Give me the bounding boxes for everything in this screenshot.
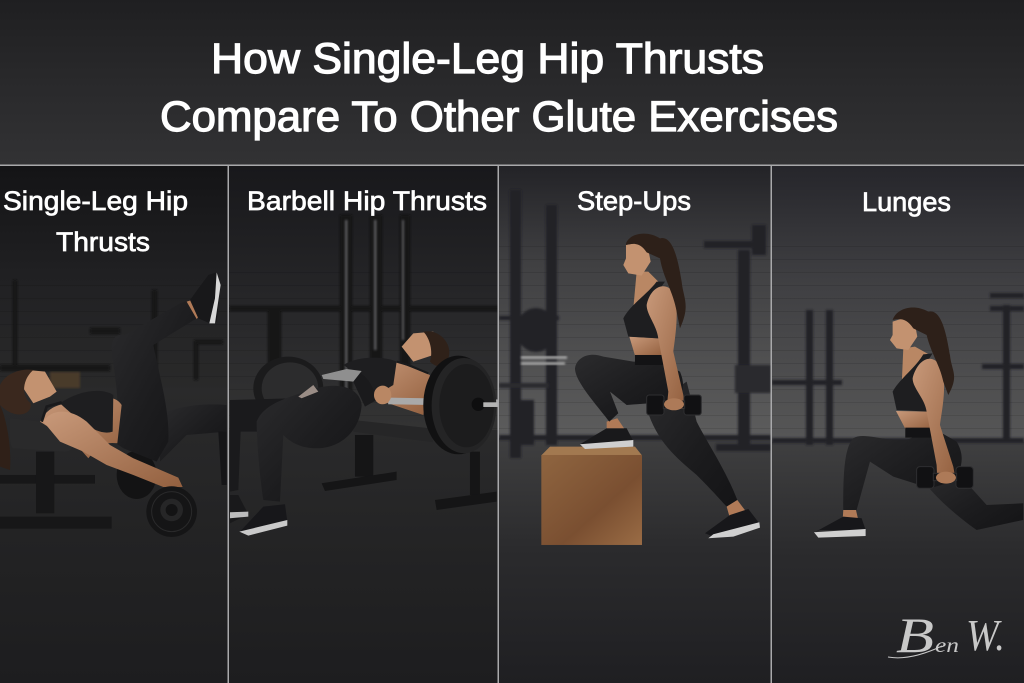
panel: lunges bbox=[772, 166, 1024, 683]
dumbbell bbox=[647, 395, 701, 415]
head bbox=[890, 315, 917, 350]
dumbbell bbox=[146, 486, 197, 537]
arm bbox=[913, 359, 956, 481]
upper body bbox=[40, 397, 122, 458]
panel dividers bbox=[0, 164, 1024, 683]
hip pad bbox=[345, 369, 376, 406]
title bbox=[160, 35, 838, 141]
heading: barbell hip thrusts: Barbell Hip Thrusts bbox=[247, 186, 487, 216]
signature: W. bbox=[966, 611, 1005, 660]
signature bbox=[888, 607, 1005, 663]
panel: step-ups bbox=[499, 177, 770, 584]
barbell bbox=[388, 398, 498, 405]
panel: barbell hip thrusts bbox=[229, 166, 498, 536]
figure: woman doing single-leg hip thrust on bench bbox=[0, 272, 227, 537]
panel: single-leg hip thrusts bbox=[0, 166, 228, 537]
signature: B bbox=[896, 607, 934, 663]
chest and head bbox=[374, 362, 430, 415]
heading: single-leg hip thrusts: Single-Leg Hip bbox=[3, 186, 188, 216]
heading: step-ups: Step-Ups bbox=[577, 186, 691, 216]
hanging hair bbox=[0, 405, 10, 470]
rear plate bbox=[253, 356, 323, 400]
torso bbox=[896, 411, 933, 430]
title: Compare To Other Glute Exercises bbox=[160, 93, 838, 141]
front shoe bbox=[814, 517, 866, 533]
signature: en bbox=[935, 635, 959, 657]
far leg bbox=[230, 398, 285, 492]
figure: woman stepping onto box bbox=[541, 234, 760, 545]
planted leg bbox=[160, 404, 227, 462]
wooden box bbox=[541, 447, 642, 545]
head bbox=[623, 241, 651, 276]
bench bbox=[0, 452, 112, 528]
title: How Single-Leg Hip Thrusts bbox=[211, 35, 764, 83]
front shoe bbox=[580, 428, 633, 444]
raised leg bbox=[117, 317, 168, 462]
arm bbox=[647, 286, 685, 409]
header band bbox=[0, 0, 1024, 165]
figure: woman doing barbell hip thrust bbox=[230, 331, 500, 536]
arm bbox=[43, 412, 183, 487]
dumbbell bbox=[917, 467, 973, 488]
back shoe bbox=[705, 509, 759, 537]
heading: single-leg hip thrusts: Thrusts bbox=[56, 227, 150, 257]
raised shoe bbox=[190, 272, 221, 323]
back leg bbox=[647, 382, 737, 507]
near leg bbox=[257, 386, 362, 502]
heading: single-leg hip thrusts bbox=[4, 190, 188, 252]
back leg bbox=[927, 472, 1023, 530]
near shoe bbox=[241, 504, 287, 531]
figure: woman in lunge bbox=[814, 308, 1023, 538]
head bbox=[23, 370, 57, 403]
front leg bbox=[843, 428, 962, 510]
torso bbox=[629, 337, 663, 356]
far roller bbox=[117, 451, 157, 499]
front leg bbox=[575, 355, 683, 422]
bench bbox=[322, 420, 497, 510]
heading: lunges: Lunges bbox=[862, 187, 951, 217]
hand bbox=[374, 386, 391, 404]
